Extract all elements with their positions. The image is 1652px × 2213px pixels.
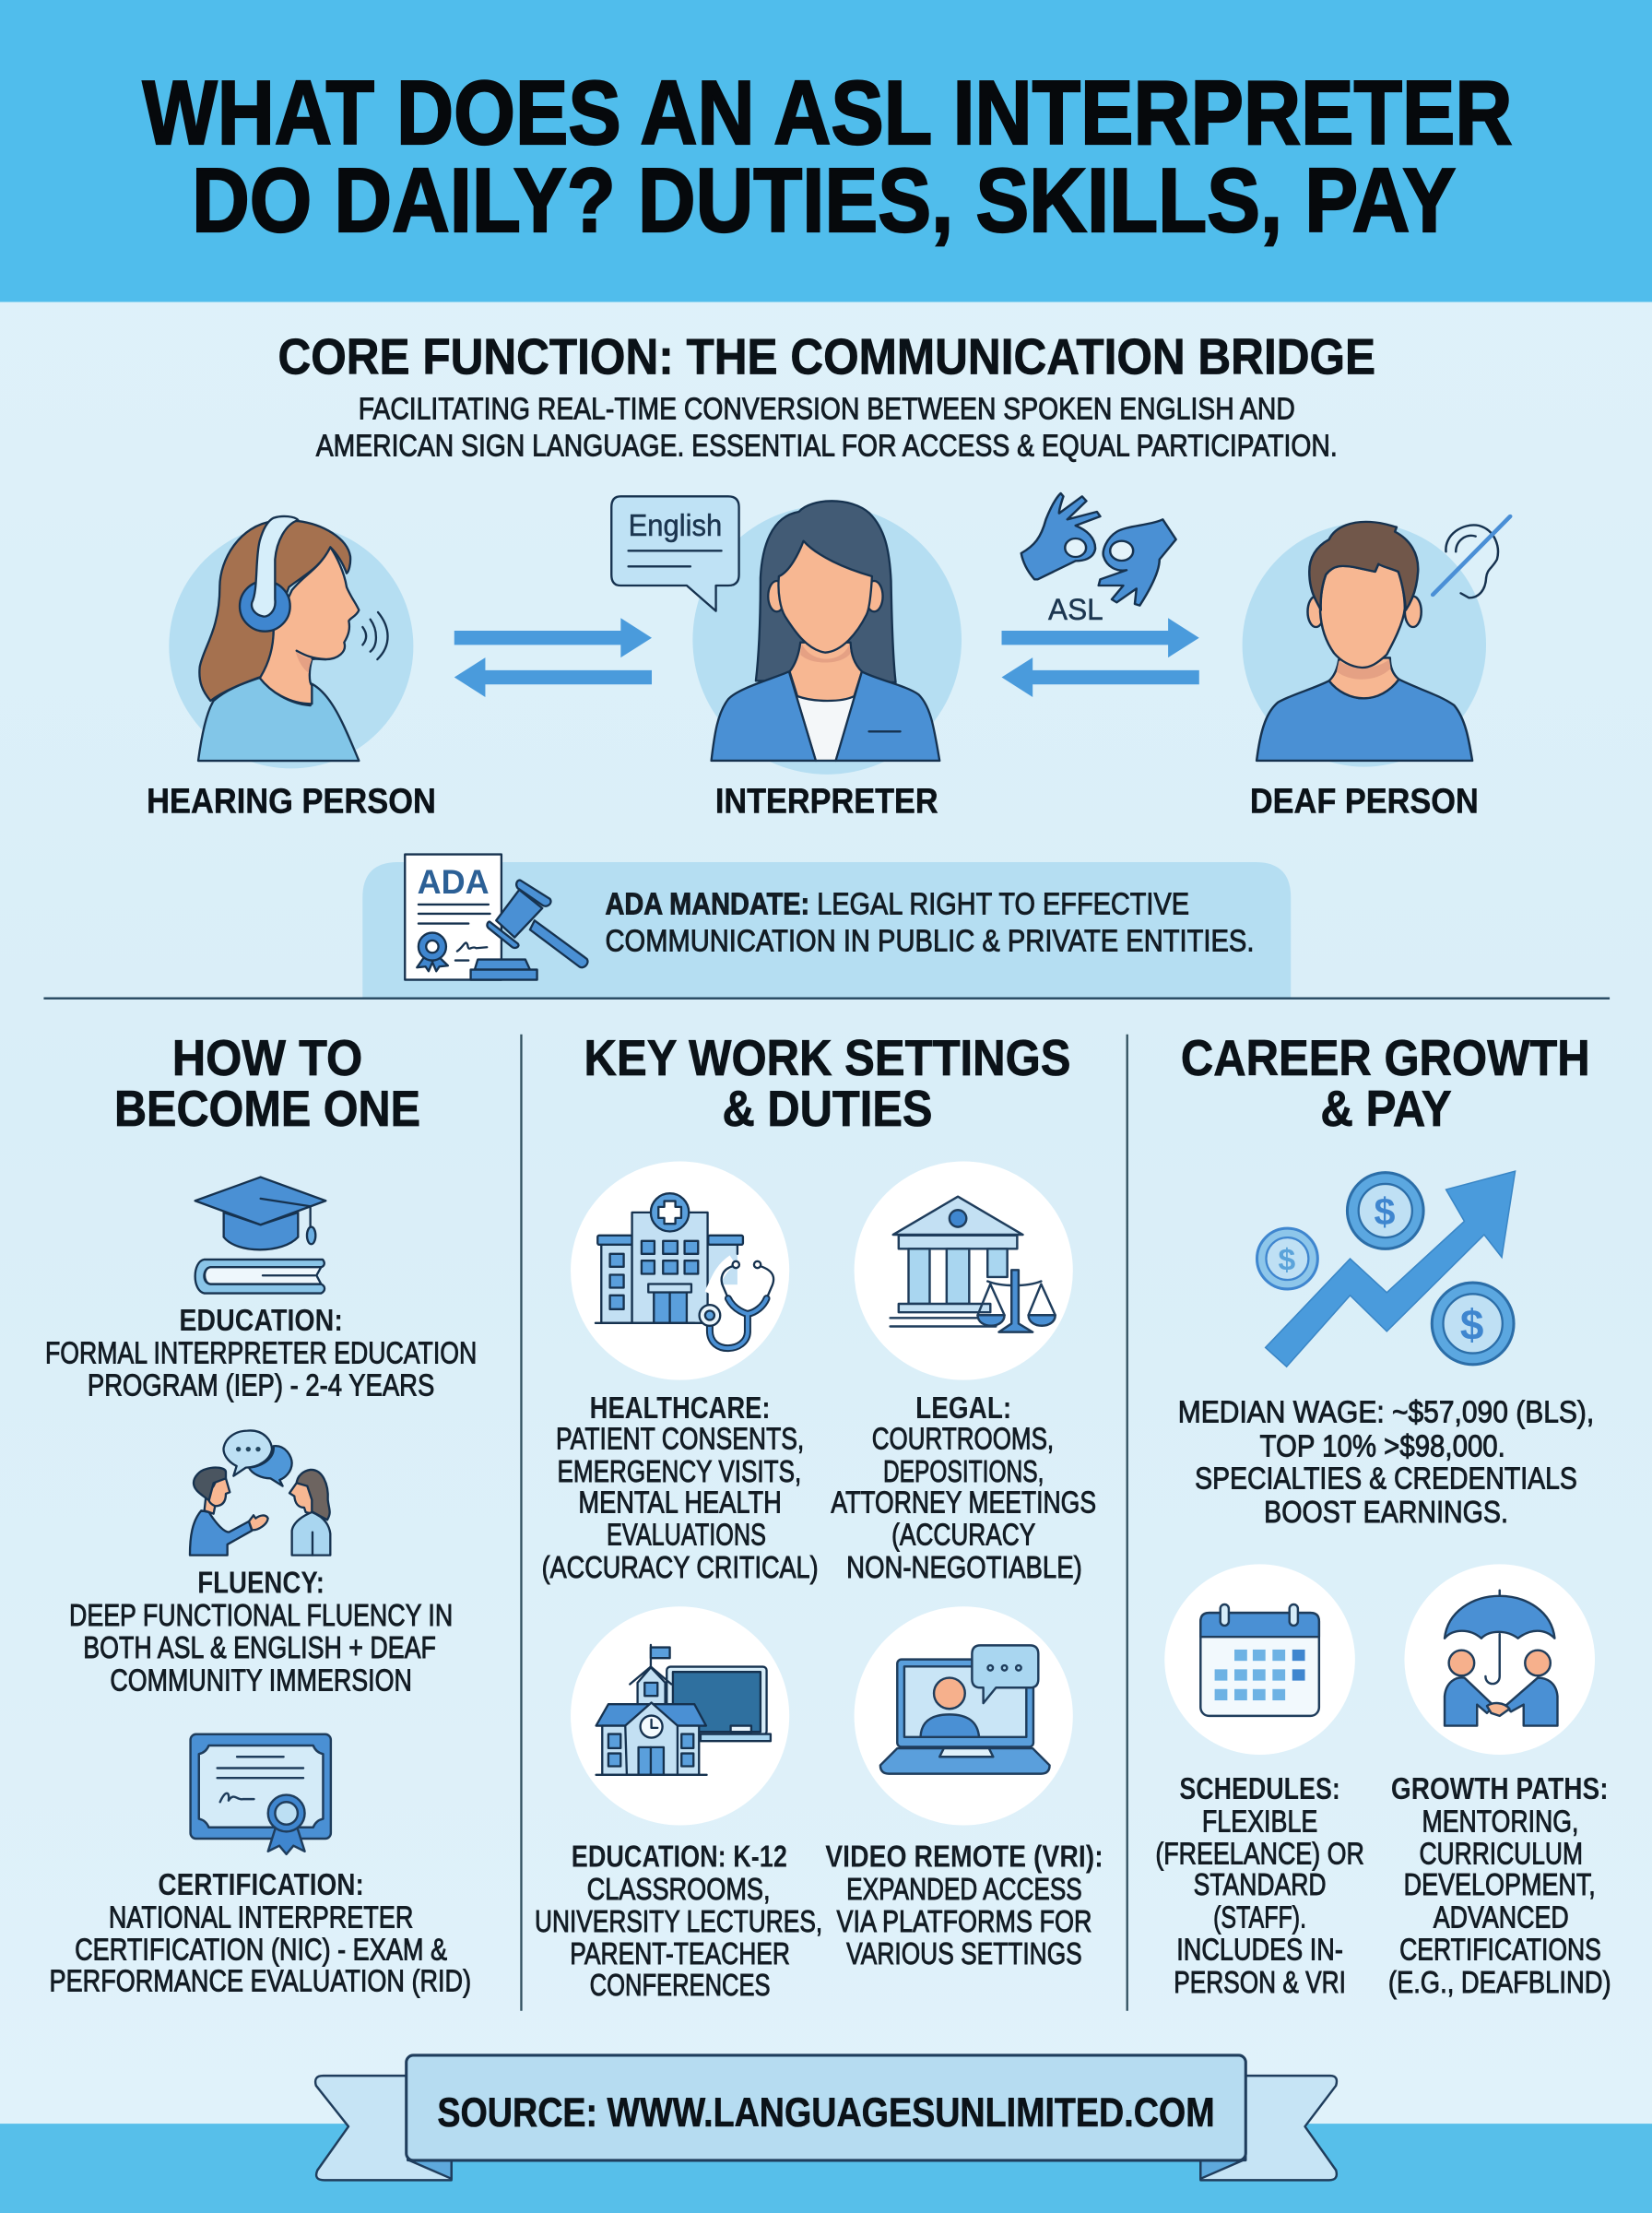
icon: rising arrow with coins xyxy=(1257,1171,1516,1367)
text: legal: ATTORNEY MEETINGS xyxy=(831,1486,1096,1521)
arrows: interpreter to deaf person xyxy=(1002,618,1199,697)
heading: BECOME ONE xyxy=(114,1080,420,1137)
text: schedules: (STAFF). xyxy=(1213,1900,1306,1935)
text: fluency: FLUENCY: xyxy=(197,1567,324,1601)
icon: rising arrow with coins: $ xyxy=(1460,1300,1483,1348)
text: median wage: TOP 10% >$98,000. xyxy=(1260,1429,1505,1463)
text: growth paths: MENTORING, xyxy=(1422,1805,1578,1839)
icon: two people conversing xyxy=(190,1430,330,1556)
text: education settings: CONFERENCES xyxy=(590,1969,771,2003)
text: video remote xyxy=(825,1840,1103,1971)
text: education: FORMAL INTERPRETER EDUCATION xyxy=(45,1336,477,1370)
text: schedules: INCLUDES IN- xyxy=(1176,1934,1343,1968)
text: schedules: PERSON & VRI xyxy=(1174,1966,1346,2000)
column: key work settings and duties xyxy=(535,1029,1103,2003)
text: certification: CERTIFICATION: xyxy=(158,1868,364,1902)
icon: laptop video call xyxy=(855,1606,1073,1825)
arrows: hearing person to interpreter xyxy=(454,618,652,697)
figure: interpreter xyxy=(692,501,962,775)
text: fluency: COMMUNITY IMMERSION xyxy=(110,1663,412,1698)
icon: ASL signing hands xyxy=(1021,493,1176,606)
text: certification xyxy=(50,1868,471,1998)
text: education: PROGRAM (IEP) - 2-4 YEARS xyxy=(88,1368,434,1402)
text: education xyxy=(45,1304,477,1402)
text: growth paths: ADVANCED xyxy=(1434,1900,1569,1935)
text: healthcare: (ACCURACY CRITICAL) xyxy=(542,1551,819,1585)
ADA text: ADA MANDATE: LEGAL RIGHT TO EFFECTIVE xyxy=(606,888,1189,922)
text: certification: CERTIFICATION (NIC) - EXAM & xyxy=(75,1934,447,1968)
text: healthcare: EMERGENCY VISITS, xyxy=(557,1455,801,1489)
text: growth paths: CURRICULUM xyxy=(1419,1838,1583,1872)
text: schedules: FLEXIBLE xyxy=(1202,1805,1317,1839)
icon: school and chalkboard xyxy=(571,1606,789,1825)
text: median wage: MEDIAN WAGE: ~$57,090 (BLS), xyxy=(1178,1396,1594,1430)
text: education settings: CLASSROOMS, xyxy=(587,1873,771,1907)
text: legal: DEPOSITIONS, xyxy=(883,1455,1044,1489)
text: certification: NATIONAL INTERPRETER xyxy=(109,1900,413,1935)
text: schedules: STANDARD xyxy=(1194,1868,1326,1902)
person labels xyxy=(147,781,1479,821)
text: growth paths: CERTIFICATIONS xyxy=(1399,1934,1601,1968)
column: how to become one xyxy=(45,1029,477,1998)
text: schedules xyxy=(1155,1772,1364,2000)
icon: crossed-out ear xyxy=(1433,516,1510,598)
panel: ADA mandate xyxy=(362,855,1291,998)
text: fluency: DEEP FUNCTIONAL FLUENCY IN xyxy=(69,1599,453,1633)
icon: graduation cap and book xyxy=(195,1178,325,1294)
figure: hearing person xyxy=(169,516,413,768)
text: video remote: VARIOUS SETTINGS xyxy=(846,1937,1082,1971)
core function description xyxy=(316,393,1338,463)
text: video remote: VIA PLATFORMS FOR xyxy=(836,1905,1092,1939)
text: median wage xyxy=(1178,1396,1594,1530)
source ribbon xyxy=(315,2055,1337,2180)
icon: courthouse and scales xyxy=(855,1161,1073,1380)
text: legal: NON-NEGOTIABLE) xyxy=(846,1551,1082,1585)
person labels: HEARING PERSON xyxy=(147,781,436,821)
icon: hospital and stethoscope xyxy=(571,1161,789,1380)
text: legal: COURTROOMS, xyxy=(872,1423,1054,1457)
speech bubble: English xyxy=(611,496,739,611)
core function description: FACILITATING REAL-TIME CONVERSION BETWEEN SPOKEN ENGLISH AND xyxy=(359,393,1295,427)
core function description: AMERICAN SIGN LANGUAGE. ESSENTIAL FOR ACCESS & EQUAL PARTICIPATION. xyxy=(316,429,1338,463)
heading xyxy=(114,1029,420,1137)
text: growth paths xyxy=(1388,1772,1611,2000)
text: education settings: PARENT-TEACHER xyxy=(570,1937,790,1971)
heading: & DUTIES xyxy=(723,1080,933,1137)
text: certification: PERFORMANCE EVALUATION (RID) xyxy=(50,1964,471,1998)
speech bubble: English: English xyxy=(629,509,722,543)
icon: rising arrow with coins: $ xyxy=(1375,1190,1396,1233)
text: schedules: (FREELANCE) OR xyxy=(1155,1838,1364,1872)
text: healthcare xyxy=(542,1391,819,1585)
text: fluency xyxy=(69,1567,453,1698)
text: growth paths: DEVELOPMENT, xyxy=(1404,1868,1596,1902)
text: healthcare: EVALUATIONS xyxy=(607,1519,766,1553)
icon: umbrella and handshake xyxy=(1404,1564,1595,1755)
icon: calendar xyxy=(1164,1564,1355,1755)
text: schedules: SCHEDULES: xyxy=(1179,1772,1340,1806)
icon: ADA document and gavel xyxy=(405,855,587,980)
text: healthcare: PATIENT CONSENTS, xyxy=(556,1423,804,1457)
text: growth paths: GROWTH PATHS: xyxy=(1391,1772,1609,1806)
heading: CAREER GROWTH xyxy=(1181,1029,1590,1086)
text: healthcare: MENTAL HEALTH xyxy=(578,1486,782,1521)
ADA text: COMMUNICATION IN PUBLIC & PRIVATE ENTITIES. xyxy=(606,924,1254,958)
ADA text xyxy=(606,888,1254,958)
text: education settings: UNIVERSITY LECTURES, xyxy=(535,1905,822,1939)
person labels: INTERPRETER xyxy=(715,781,938,821)
ASL label: ASL xyxy=(1048,593,1103,626)
text: legal xyxy=(831,1391,1096,1585)
text: education: EDUCATION: xyxy=(179,1304,343,1338)
icon: rising arrow with coins: $ xyxy=(1278,1243,1295,1277)
text: education settings: EDUCATION: K-12 xyxy=(572,1840,787,1875)
heading xyxy=(584,1029,1071,1137)
icon: ADA document and gavel: ADA xyxy=(418,862,490,901)
header band with title: DO DAILY? DUTIES, SKILLS, PAY xyxy=(192,149,1456,251)
heading xyxy=(1181,1029,1590,1137)
text: median wage: BOOST EARNINGS. xyxy=(1264,1496,1508,1530)
text: median wage: SPECIALTIES & CREDENTIALS xyxy=(1195,1462,1577,1496)
person labels: DEAF PERSON xyxy=(1250,781,1479,821)
source ribbon: SOURCE: WWW.LANGUAGESUNLIMITED.COM xyxy=(437,2090,1215,2136)
text: healthcare: HEALTHCARE: xyxy=(590,1391,771,1426)
text: video remote: EXPANDED ACCESS xyxy=(846,1873,1082,1907)
text: legal: LEGAL: xyxy=(915,1391,1011,1426)
text: education settings xyxy=(535,1840,822,2003)
heading: KEY WORK SETTINGS xyxy=(584,1029,1071,1086)
core function heading: CORE FUNCTION: THE COMMUNICATION BRIDGE xyxy=(277,328,1375,385)
text: legal: (ACCURACY xyxy=(891,1519,1035,1553)
footer band xyxy=(0,2124,1652,2213)
heading: & PAY xyxy=(1320,1080,1452,1137)
icon: certificate xyxy=(191,1734,331,1854)
heading: HOW TO xyxy=(172,1029,362,1086)
header band with title xyxy=(0,0,1652,302)
figure: deaf person xyxy=(1243,522,1486,767)
text: video remote: VIDEO REMOTE (VRI): xyxy=(825,1840,1103,1875)
text: fluency: BOTH ASL & ENGLISH + DEAF xyxy=(83,1631,436,1665)
column: career growth and pay xyxy=(1155,1029,1611,2000)
